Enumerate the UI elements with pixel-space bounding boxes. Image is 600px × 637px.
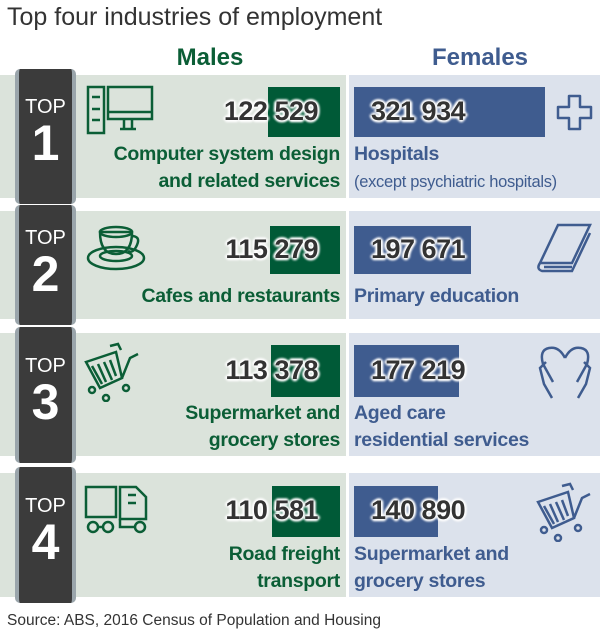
label: computer system design bbox=[114, 143, 340, 192]
label: supermarket and grocery stores bbox=[185, 402, 340, 451]
panel: males row 2 bbox=[0, 211, 346, 319]
label: cafes and restaurants: Cafes and restaurants bbox=[141, 285, 340, 307]
panel: females row 4 bbox=[349, 473, 600, 597]
panel: females row 1 bbox=[349, 75, 600, 198]
bar: females 197671 bbox=[354, 226, 471, 274]
badge top 2: TOP bbox=[25, 227, 66, 249]
panel: females row 3 bbox=[349, 333, 600, 456]
icon: hospital cross bbox=[556, 94, 592, 130]
heading: Females: Females bbox=[432, 44, 528, 71]
bar: males 115279 bbox=[270, 226, 340, 274]
icon: shopping cart female bbox=[536, 482, 590, 542]
label: road freight transport bbox=[229, 543, 340, 592]
label: aged care bbox=[354, 402, 529, 451]
number: 321 934: 321 934 bbox=[371, 96, 465, 126]
badge top 1: TOP bbox=[25, 96, 66, 118]
label: road freight transport: Road freight bbox=[229, 543, 340, 565]
bar: males 122529 bbox=[268, 87, 340, 137]
bar: males 113378 bbox=[271, 345, 340, 397]
badge top 4: 4 bbox=[32, 514, 59, 570]
label: supermarket female: grocery stores bbox=[354, 570, 485, 592]
badge top 2 bbox=[15, 205, 76, 325]
label: primary education: Primary education bbox=[354, 285, 519, 307]
bar: males 110581 bbox=[272, 486, 340, 537]
number: 115 279: 115 279 bbox=[225, 234, 318, 264]
label: supermarket and grocery stores: Supermarket and bbox=[185, 402, 340, 424]
badge top 4 bbox=[15, 467, 76, 603]
number: 122 529: 122 529 bbox=[224, 96, 318, 126]
panel: males row 3 bbox=[0, 333, 346, 456]
icon: caring hands heart bbox=[538, 346, 592, 399]
badge top 3 bbox=[15, 327, 76, 463]
label: supermarket female bbox=[354, 543, 509, 592]
badge top 1: 1 bbox=[32, 115, 59, 171]
row 4 bbox=[0, 467, 600, 603]
number: 113 378: 113 378 bbox=[225, 355, 318, 385]
icon: book bbox=[537, 224, 592, 272]
bar: females 140890 bbox=[354, 486, 438, 537]
badge top 4: TOP bbox=[25, 495, 66, 517]
icon: shopping cart bbox=[84, 342, 138, 402]
number: 197 671: 197 671 bbox=[371, 234, 465, 264]
heading: Males: Males bbox=[177, 44, 243, 71]
row 3 bbox=[0, 327, 600, 463]
badge top 1 bbox=[15, 69, 76, 204]
icon: coffee cup bbox=[86, 226, 146, 270]
label: supermarket female: Supermarket and bbox=[354, 543, 509, 565]
icon: truck bbox=[84, 486, 148, 534]
label: computer system design: Computer system design bbox=[114, 143, 340, 165]
badge top 2: 2 bbox=[32, 246, 59, 302]
panel: males row 1 bbox=[0, 75, 346, 198]
title: Top four industries of employment bbox=[7, 3, 382, 31]
number: 110 581: 110 581 bbox=[225, 495, 318, 525]
bar: females 321934 bbox=[354, 87, 545, 137]
badge top 3: 3 bbox=[32, 374, 59, 430]
row 1 bbox=[0, 69, 600, 204]
label: hospitals bbox=[354, 143, 557, 191]
bar: females 177219 bbox=[354, 345, 459, 397]
number: 140 890: 140 890 bbox=[371, 495, 465, 525]
row 2 bbox=[0, 205, 600, 325]
label: computer system design: and related services bbox=[158, 170, 340, 192]
panel: females row 2 bbox=[349, 211, 600, 319]
label: road freight transport: transport bbox=[257, 570, 340, 592]
badge top 3: TOP bbox=[25, 355, 66, 377]
icon: computer bbox=[86, 86, 154, 134]
number: 177 219: 177 219 bbox=[371, 355, 465, 385]
label: hospitals: Hospitals bbox=[354, 143, 439, 165]
label: aged care: residential services bbox=[354, 429, 529, 451]
label: hospitals: (except psychiatric hospitals) bbox=[354, 173, 557, 191]
label: aged care: Aged care bbox=[354, 402, 446, 424]
label: supermarket and grocery stores: grocery stores bbox=[209, 429, 340, 451]
panel: males row 4 bbox=[0, 473, 346, 597]
source: Source: ABS, 2016 Census of Population and Housing bbox=[7, 612, 381, 629]
